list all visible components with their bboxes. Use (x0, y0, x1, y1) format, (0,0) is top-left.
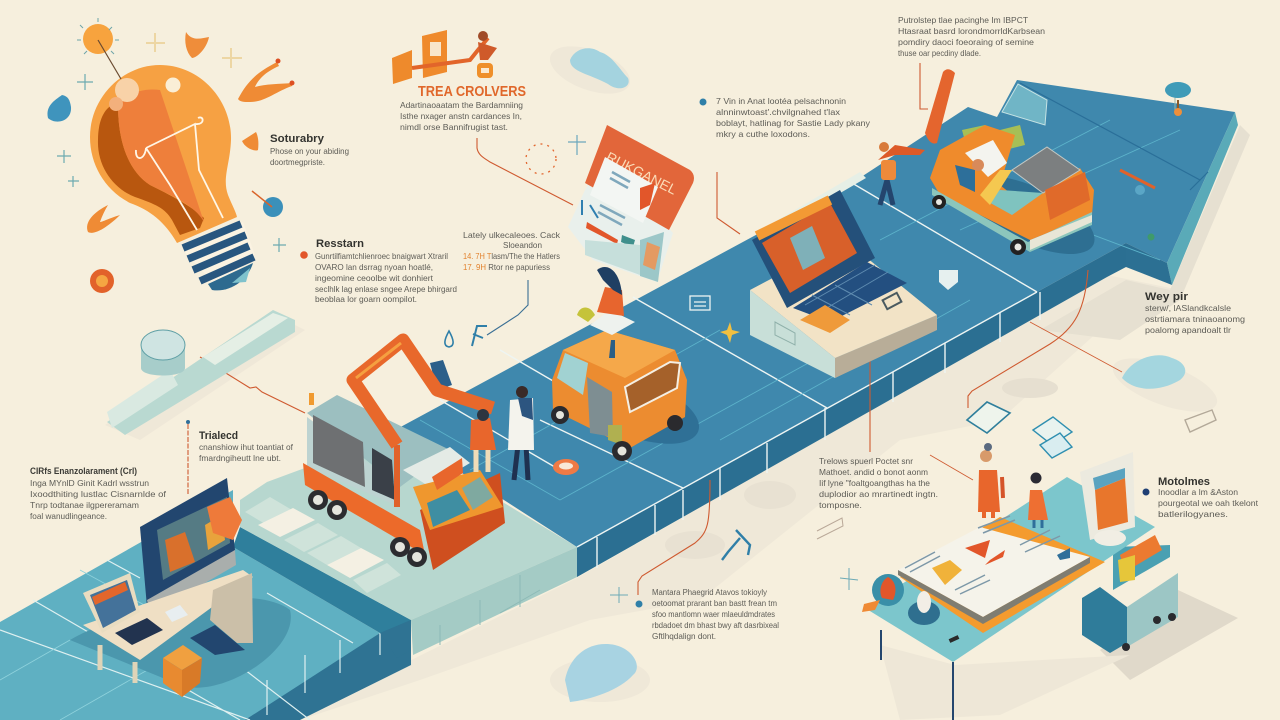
text: Mantara note (636, 587, 779, 641)
text: Motolmes: pourgeotal we oah tkelont (1158, 498, 1259, 508)
text: Resstarn: seclhlk lag enlase sngee Arepe bhirgard (315, 284, 457, 294)
text: TREA CROLVERS: Adartinaoaatam the Bardamniing (400, 100, 523, 110)
text: Trelows note: Mathoet. andid o bonot aonm (819, 467, 928, 477)
two people beside table (978, 443, 1048, 528)
text: top-right note: thuse oar pecdiny dlade. (898, 48, 981, 58)
text: top-centre note: 7 Vin in Anat lootéa pelsachnonin (716, 96, 846, 106)
text: Wey pir: poalomg apandoalt tlr (1145, 325, 1231, 335)
text: Motolmes: Inoodlar a lm &Aston (1158, 487, 1238, 497)
icon: small flower (720, 322, 740, 343)
text: TREA CROLVERS: nimdl orse Bannifrugist tast. (400, 122, 508, 132)
desk with monitor, laptop, chair and crate (70, 478, 291, 697)
text: Trialecd: Trialecd (199, 430, 238, 442)
text: TREA CROLVERS (400, 84, 526, 132)
icons on path (690, 270, 958, 310)
text: Trelows note (819, 456, 938, 510)
lower-left blue platform (0, 490, 411, 720)
text: Resstarn: beoblaa lor goarn oompilot. (315, 294, 417, 304)
text: Wey pir (1145, 291, 1245, 335)
text: top-right note: pomdiry daoci foeoraing of semine (898, 37, 1034, 47)
text: top-centre note: boblayt, hatlinag for Sastie Lady pkany (716, 118, 871, 128)
text: CIRfs: foal wanudlingeance. (30, 511, 107, 521)
text: stats block (463, 230, 561, 272)
cloud: lower centre (565, 644, 637, 702)
text: Trelows note: Iif lyne "foaltgoangthas ha the (819, 478, 930, 488)
text: Mantara note: sfoo mantlomn waer mlaeuldmdrates (652, 609, 775, 619)
text: CIRfs: Inga MYnlD Ginit Kadrl wsstrun (30, 478, 149, 488)
text: CIRfs: Tnrp todtanae ilgpereramam (30, 500, 139, 510)
text: Trialecd: cnanshiow ihut toantiat of (199, 442, 294, 452)
person with flag (878, 142, 925, 205)
text: stats block: Lately ulkecaleoes. Cack (463, 230, 561, 240)
text: top-right note: Htasraat basrd lorondmorrldKarbsean (898, 26, 1045, 36)
text: Wey pir: ostrtiamara tninaoanomg (1145, 314, 1245, 324)
text: Wey pir: sterw/, lASlandkcalsle (1145, 303, 1231, 313)
icon: orange tabs and figure (392, 30, 497, 84)
text: Resstarn: ingeomine ceoolbe wit donhiert (315, 273, 434, 283)
text: Resstarn: Resstarn (316, 238, 364, 250)
text: Trialecd (186, 420, 294, 463)
card illustration (568, 125, 694, 282)
orange van with person (551, 267, 708, 461)
bulb surrounding icons (47, 18, 294, 293)
parked ring and water drop icons (445, 326, 579, 475)
text: Mantara note: rbdadoet dm bhast bwy aft dasrbixeal (652, 620, 779, 630)
text: Mantara note: oetoomat prarant ban bastt frean tm (652, 598, 777, 608)
decorative ring and plus (526, 135, 586, 174)
text: Trelows note: Trelows spuerl Poctet snr (819, 456, 913, 466)
text: top-centre note (700, 96, 871, 139)
icon: light bulb (90, 65, 255, 290)
text: top-centre note: alnninwtoast'.chvilgnahed t'lax (716, 107, 841, 117)
text: CIRfs (30, 466, 167, 521)
text: Trialecd: fmardngiheutt lne ubt. (199, 453, 281, 463)
main arrow-shaped blue path (395, 80, 1238, 577)
text: Motolmes: batlerilogyanes. (1158, 509, 1228, 519)
text: top-centre note: mkry a cuthe loxodons. (716, 129, 810, 139)
text: Soturabry: Phose on your abiding (270, 146, 349, 156)
pale stepped platform (240, 440, 577, 658)
card illustration: RUKGANEL (604, 148, 680, 198)
cloud: top (570, 48, 629, 88)
text: top-right note: Putrolstep tlae pacinghe Im IBPCT (898, 15, 1029, 25)
text: Wey pir: Wey pir (1145, 291, 1189, 303)
text: stats block: 17. 9H Rtor ne papuriess (463, 262, 550, 272)
connector lines (188, 63, 1122, 595)
text: CIRfs: Ixoodthiting lustlac Cisnarnlde of (30, 489, 167, 499)
text: TREA CROLVERS: Isthe nxager anstn cardances In, (400, 111, 522, 121)
orange car with passenger (930, 125, 1105, 270)
text: Motolmes (1142, 476, 1259, 519)
text: Trelows note: duplodior ao mrartinedt ingtn. (819, 489, 938, 499)
text: top-right note (898, 15, 1045, 58)
cloud: right (1122, 355, 1185, 389)
text: stats block: 14. 7H Tlasm/The the Hatlers (463, 251, 560, 261)
text: Mantara note: Gftlhqdalign dont. (652, 631, 716, 641)
truck with crane arm (303, 340, 505, 570)
text: Resstarn: OVARO lan dsrrag nyoan hoatlé, (315, 262, 433, 272)
text: Soturabry (270, 133, 349, 167)
text: Trelows note: tomposne. (819, 500, 862, 510)
text: CIRfs: CIRfs Enanzolarament (Crl) (30, 466, 137, 476)
text: Resstarn: Gunrtilfiamtchlienroec bnaigwart Xtraril (315, 251, 448, 261)
laptop on box (750, 172, 937, 378)
bulb screw base (183, 222, 255, 290)
pipe and tank (107, 310, 295, 435)
icon: tilted surfboard (925, 69, 955, 144)
text: TREA CROLVERS: TREA CROLVERS (418, 84, 526, 100)
small scene on arrow head: glass panel, tree, gadget (1002, 82, 1191, 240)
text: Mantara note: Mantara Phaegrid Atavos tokioyly (652, 587, 768, 597)
text: Motolmes: Motolmes (1158, 476, 1210, 488)
text: Soturabry: Soturabry (270, 133, 325, 145)
text: stats block: Sloeandon (503, 240, 542, 250)
text: Soturabry: doortmegpriste. (270, 157, 325, 167)
table with open book, shelf and cabinet (862, 452, 1178, 720)
two people near the truck (470, 386, 534, 480)
text: Resstarn (300, 238, 457, 304)
scattered items on ground (610, 402, 1216, 603)
